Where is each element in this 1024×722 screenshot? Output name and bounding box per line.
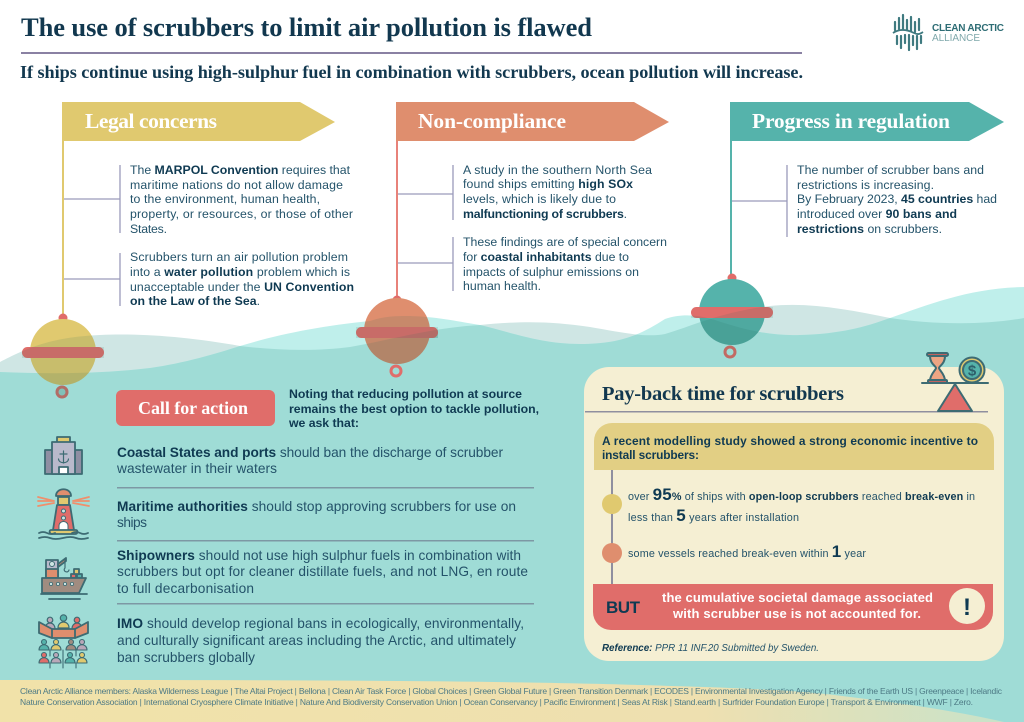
footer: alliance members: Nature Conservation Association | International Cryosphere Climate Initiative | Nature And Biodiversity Conservation Union | Ocean Conservancy | Pacific Environment | Seas At Risk | Stand.earth | Surfrider Foundation Europe | Transport & Environment | WWF | Zero. [20,697,973,707]
text: call intro: we ask that: [288,416,359,430]
banner: legal concerns [62,102,335,141]
text: bans and restrictions: restrictions on scrubbers. [797,222,942,236]
bullet: 95 percent: less than 5 years after installation [628,506,799,525]
callout: but: with scrubber use is not accounted for. [672,606,921,621]
text: water pollution problem: into a water pollution problem which is [130,265,350,279]
heading: pay-back time: Pay-back time for scrubbers [602,383,844,405]
panel: call for action [38,387,539,668]
text: high SOx levels: malfunctioning of scrubbers. [463,207,627,221]
text: bans and restrictions: The number of scrubber bans and [797,163,984,177]
icon: exclamation: ! [963,594,971,621]
text: MARPOL convention: The MARPOL Convention requires that [130,163,351,177]
text: shipowners: to full decarbonisation [117,581,254,596]
icon: lighthouse [38,489,89,539]
text: water pollution problem: on the Law of the Sea. [130,294,260,308]
text: coastal states: wastewater in their waters [116,461,277,476]
text: MARPOL convention: maritime nations do not allow damage [130,178,343,192]
panel: pay-back time for scrubbers [584,353,1004,661]
text: MARPOL convention [130,163,353,236]
text: call intro [288,387,539,430]
text: IMO: IMO should develop regional bans in ecologically, environmentally, [117,616,524,631]
panel: legal concerns [62,102,354,316]
text: shipowners: scrubbers but opt for cleaner distillate fuels, and not LNG, en route [117,564,528,579]
text: water pollution problem [130,250,354,308]
text: call intro: Noting that reducing pollution at source [289,387,522,401]
banner: non-compliance [396,102,669,141]
icon: ship [41,558,87,599]
text: maritime authorities [117,499,516,530]
banner: progress in regulation: Progress in regulation [752,109,950,133]
text: high SOx levels [463,163,652,221]
text: coastal inhabitants: These findings are of special concern [463,235,667,249]
text: shipowners [117,548,528,596]
footer: alliance members: Clean Arctic Alliance members: Alaska Wilderness League | The Altai Project | Bellona | Clean Air Task Force | Global Choices | Green Global Future | Green Transition Denmark | ECODES | Environmental Investigation Agency | Friends of the Earth US | Greenpeace | Icelandic [20,686,1003,696]
bullet: 95 percent [602,485,975,525]
icon: hourglass and coin on scale: $ [968,362,977,380]
text: high SOx levels: A study in the southern North Sea [463,163,652,177]
text: bans and restrictions: restrictions is increasing. [797,178,934,192]
study box [594,423,994,470]
icon: yellow buoy [22,314,104,398]
logo: Clean Arctic Alliance: CLEAN ARCTIC [932,23,1004,34]
icon: exclamation [949,588,985,624]
banner: non-compliance: Non-compliance [418,109,566,133]
callout: but: BUT [606,598,641,617]
text: bans and restrictions: introduced over 90 bans and [797,207,957,221]
text: MARPOL convention: to the environment, human health, [130,192,320,206]
text: MARPOL convention: property, or resources, or those of other [130,207,353,221]
study box: A recent modelling study showed a strong economic incentive to [602,434,978,448]
icon: orange buoy [356,296,438,376]
banner: progress in regulation [730,102,1004,141]
text: water pollution problem: unacceptable under the UN Convention [130,280,354,294]
icon: IMO assembly [39,615,88,668]
text: maritime authorities: ships [117,515,147,530]
sea waves background [0,287,1024,722]
icon: teal buoy [691,274,773,357]
text: maritime authorities: Maritime authorities should stop approving scrubbers for use on [117,499,516,514]
logo: Clean Arctic Alliance [893,15,1004,50]
text: IMO [117,616,524,665]
text: call intro: remains the best option to tackle pollution, [289,402,539,416]
bullet: 1 year: some vessels reached break-even within 1 year [628,542,866,561]
call for action button: Call for action [138,398,248,418]
text: coastal states [116,445,503,476]
text: coastal inhabitants: impacts of sulphur emissions on [463,265,639,279]
bullet: 95 percent: over 95% of ships with open-loop scrubbers reached break-even in [628,485,975,504]
callout: but [593,584,993,630]
text: shipowners: Shipowners should not use high sulphur fuels in combination with [117,548,521,563]
text: IMO: ban scrubbers globally [117,650,255,665]
study box: install scrubbers: [602,448,699,462]
icon: port building [45,437,82,474]
callout: but: the cumulative societal damage associated [662,590,933,605]
text: coastal states: Coastal States and ports should ban the discharge of scrubber [117,445,503,460]
icon: hourglass and coin on scale [922,353,988,411]
text: bans and restrictions: By February 2023, 45 countries had [797,192,997,206]
panel: non-compliance [396,102,669,296]
call for action button [116,390,275,426]
footer sand band [0,680,1004,722]
text: bans and restrictions [797,163,997,236]
text: MARPOL convention: States. [130,222,167,236]
text: coastal inhabitants: for coastal inhabitants due to [463,250,629,264]
logo: Clean Arctic Alliance: ALLIANCE [932,33,980,44]
text: IMO: and culturally significant areas including the Arctic, and ultimately [117,633,516,648]
text: high SOx levels: found ships emitting high SOx [463,177,633,191]
text: water pollution problem: Scrubbers turn an air pollution problem [130,250,348,264]
text: high SOx levels: levels, which is likely due to [463,192,616,206]
banner: legal concerns: Legal concerns [85,109,217,133]
subtitle: If ships continue using high-sulphur fuel in combination with scrubbers, ocean pollution will increase. [20,62,803,82]
reference: Reference: PPR 11 INF.20 Submitted by Sweden. [602,643,819,654]
title: The use of scrubbers to limit air pollution is flawed [21,12,592,42]
footer: alliance members [20,686,1003,707]
text: coastal inhabitants: human health. [463,279,541,293]
panel: progress in regulation [730,102,1004,278]
text: coastal inhabitants [463,235,667,293]
